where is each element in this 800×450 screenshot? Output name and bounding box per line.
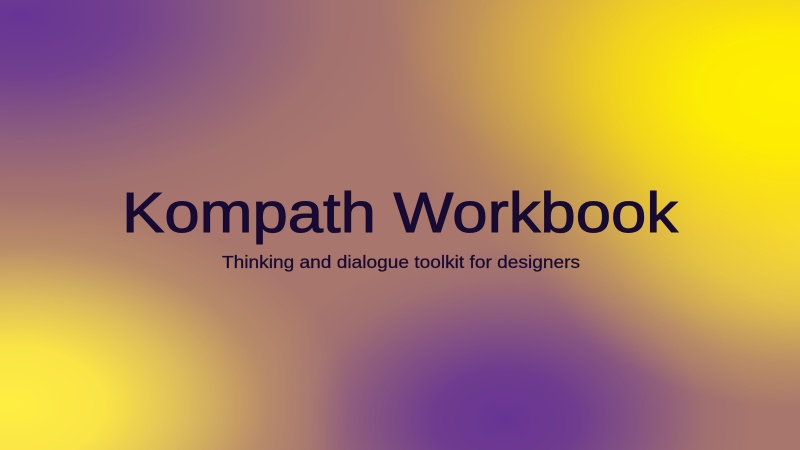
- title: Kompath Workbook: [122, 181, 679, 245]
- subtitle: Thinking and dialogue toolkit for designers: [222, 252, 580, 272]
